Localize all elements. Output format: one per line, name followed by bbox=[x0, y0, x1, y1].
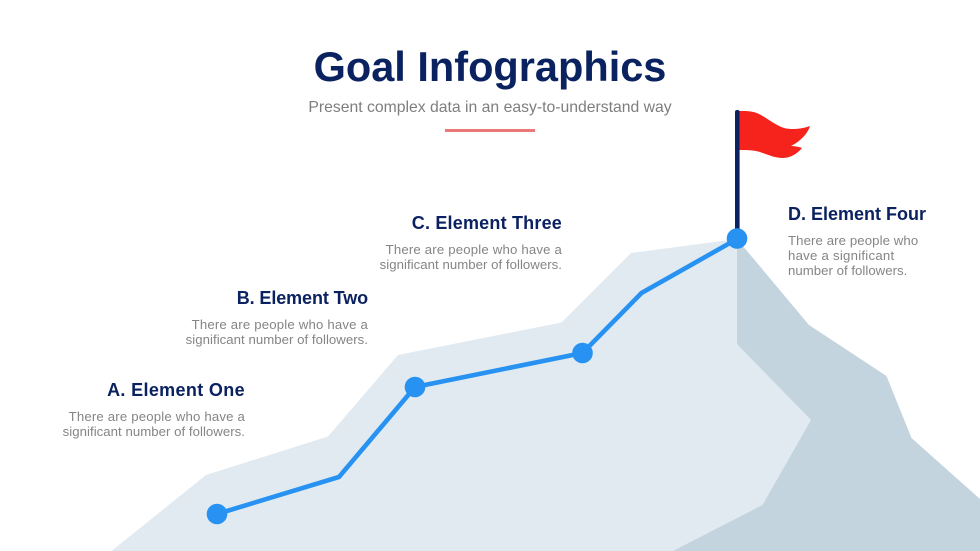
text block: B. Element Two: significant number of followers. bbox=[186, 332, 368, 347]
text block: C. Element Three: There are people who have a bbox=[386, 242, 562, 257]
text block: A. Element One: A. Element One bbox=[107, 380, 245, 400]
route marker B bbox=[405, 377, 425, 397]
flag pole bbox=[735, 110, 740, 235]
text block: B. Element Two: B. Element Two bbox=[237, 288, 368, 308]
red flag bbox=[740, 111, 810, 158]
title underline bbox=[445, 129, 534, 132]
text block: C. Element Three: significant number of followers. bbox=[380, 257, 562, 272]
text block: A. Element One: There are people who have a bbox=[69, 409, 245, 424]
text block: B. Element Two: There are people who have a bbox=[192, 317, 368, 332]
mountain light face bbox=[112, 239, 980, 551]
text block: C. Element Three bbox=[380, 213, 562, 272]
text block: D. Element Four: have a significant bbox=[788, 248, 894, 263]
text block: D. Element Four: There are people who bbox=[788, 233, 918, 248]
text block: A. Element One bbox=[63, 380, 245, 439]
subtitle: Present complex data in an easy-to-understand way bbox=[308, 98, 672, 116]
text block: D. Element Four: number of followers. bbox=[788, 263, 907, 278]
title: Goal Infographics bbox=[314, 42, 666, 90]
mountain shadow face bbox=[673, 239, 980, 551]
text block: D. Element Four bbox=[788, 204, 926, 278]
text block: B. Element Two bbox=[186, 288, 368, 347]
route line bbox=[217, 239, 737, 514]
route marker C bbox=[572, 343, 593, 363]
text block: A. Element One: significant number of followers. bbox=[63, 424, 245, 439]
route marker A bbox=[207, 504, 227, 524]
route marker D bbox=[727, 228, 747, 249]
text block: C. Element Three: C. Element Three bbox=[412, 213, 562, 233]
text block: D. Element Four: D. Element Four bbox=[788, 204, 926, 224]
